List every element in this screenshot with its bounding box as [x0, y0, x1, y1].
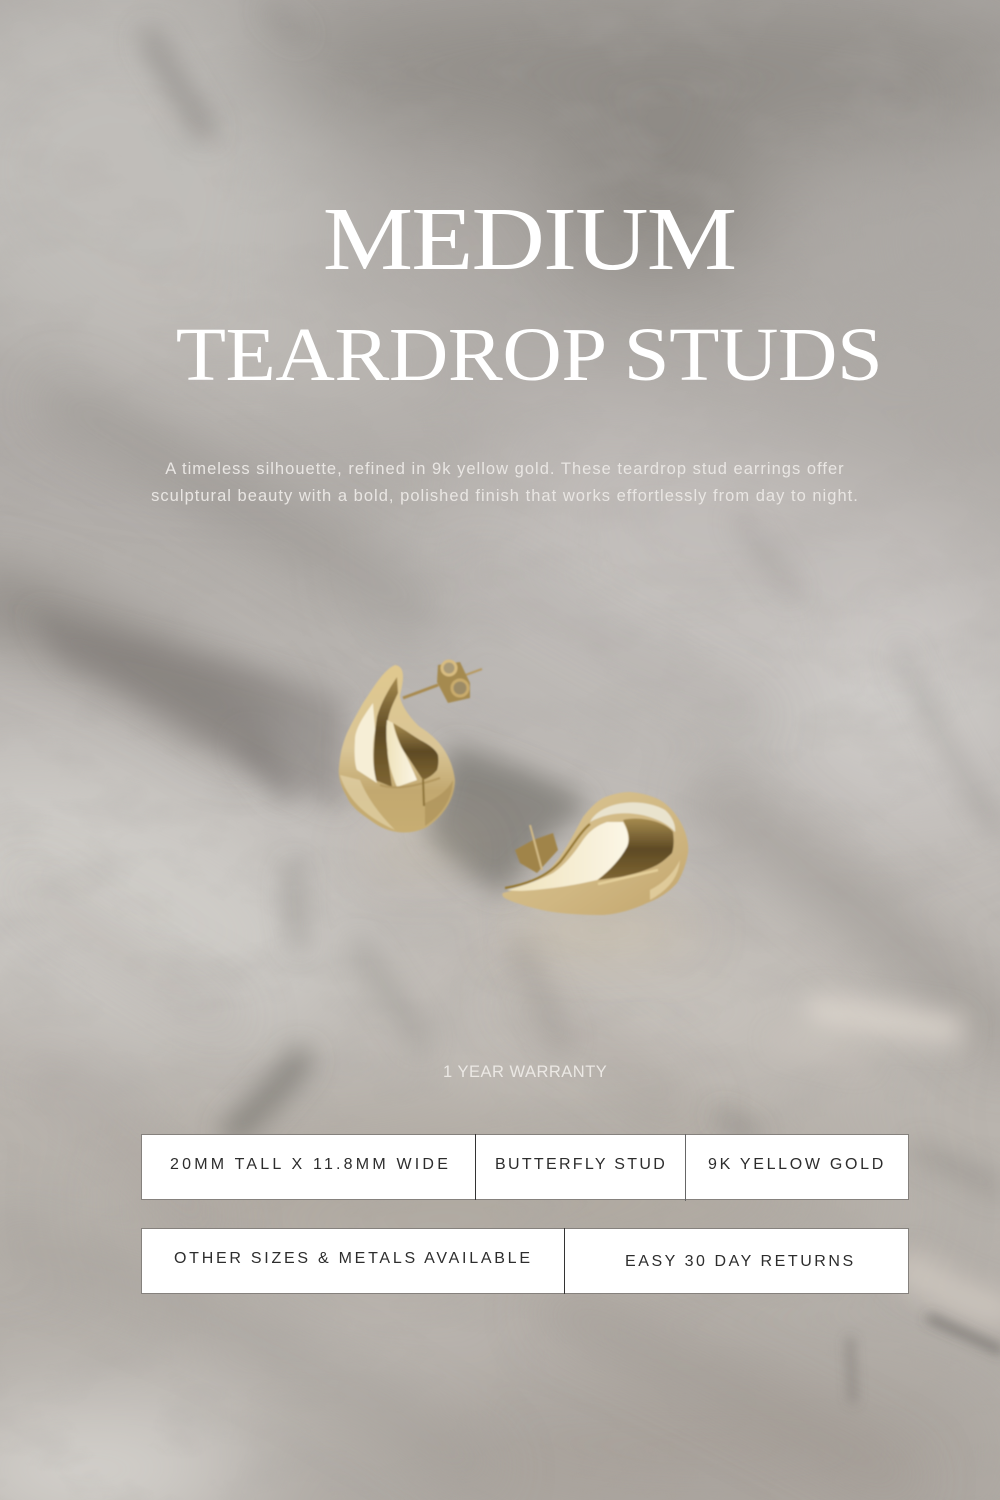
icon: right teardrop earring	[502, 792, 688, 915]
spec: dimensions: 20MM TALL X 11.8MM WIDE	[170, 1156, 451, 1173]
diagonal shadows	[0, 400, 1000, 1480]
warm glow	[360, 836, 695, 948]
earring cast shadows	[30, 610, 590, 895]
spec: closure: BUTTERFLY STUD	[495, 1156, 667, 1173]
subtitle: TEARDROP STUDS	[176, 313, 882, 397]
spec row 1	[141, 1134, 909, 1200]
warranty label: 1 YEAR WARRANTY	[443, 1063, 607, 1081]
spec: returns: EASY 30 DAY RETURNS	[625, 1253, 856, 1270]
description text: A timeless silhouette, refined in 9k yellow gold. These teardrop stud earrings offer	[165, 460, 845, 478]
spec row 2	[141, 1228, 909, 1294]
description text: sculptural beauty with a bold, polished finish that works effortlessly from day to night.	[151, 487, 859, 505]
title: MEDIUM	[323, 190, 735, 289]
description text	[151, 460, 859, 505]
marble veins	[150, 10, 1000, 1310]
spec: availability: OTHER SIZES & METALS AVAILABLE	[174, 1250, 533, 1267]
spec: metal: 9K YELLOW GOLD	[708, 1156, 886, 1173]
icon: left teardrop earring	[339, 661, 482, 832]
